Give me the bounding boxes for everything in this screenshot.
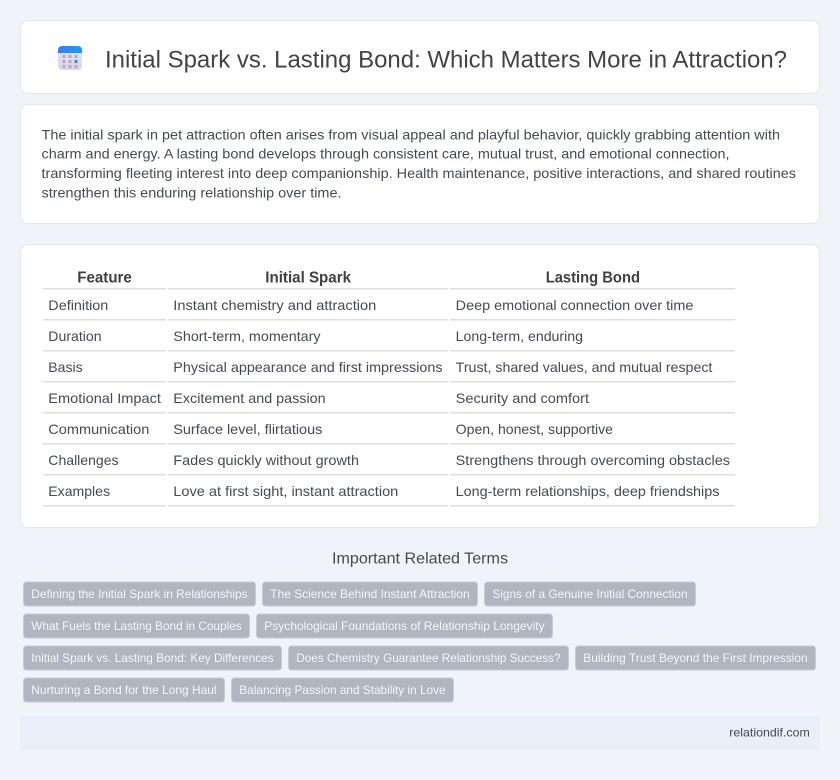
row: duration: Short-term, momentary <box>173 328 321 344</box>
row: duration: Long-term, enduring <box>456 328 583 344</box>
tag <box>24 614 250 638</box>
tag: Building Trust Beyond the First Impression <box>583 651 808 665</box>
paragraph text: strengthen this enduring relationship over time. <box>42 184 341 200</box>
panel: comparison table <box>20 244 820 528</box>
row: communication <box>48 421 613 437</box>
footer <box>20 716 820 750</box>
row: duration <box>48 328 583 344</box>
paragraph text: charm and energy. A lasting bond develops through consistent care, mutual trust, and emotional connection, <box>42 146 730 162</box>
tag: Balancing Passion and Stability in Love <box>239 683 446 697</box>
row: challenges <box>48 452 730 468</box>
tag <box>484 582 696 606</box>
row: emotional impact: Excitement and passion <box>173 390 326 406</box>
panel: related term tags <box>24 582 816 702</box>
row: emotional impact: Emotional Impact <box>48 390 161 406</box>
title: Initial Spark vs. Lasting Bond: Which Matters More in Attraction? <box>105 46 787 74</box>
table header row: Lasting Bond <box>546 270 640 286</box>
row: communication: Open, honest, supportive <box>456 421 613 437</box>
row: emotional impact: Security and comfort <box>456 390 589 406</box>
tag <box>24 678 224 702</box>
row: basis <box>48 359 713 375</box>
row: emotional impact <box>48 390 589 406</box>
row: definition <box>48 297 694 313</box>
icon: calendar <box>58 46 82 70</box>
row: examples: Examples <box>48 483 110 499</box>
table header row: Initial Spark <box>265 270 351 286</box>
row: definition: Definition <box>48 297 108 313</box>
tag: Nurturing a Bond for the Long Haul <box>31 683 217 697</box>
table header row: Feature <box>77 270 132 286</box>
tag <box>576 646 816 670</box>
tag <box>24 582 256 606</box>
table header row <box>77 270 640 286</box>
row: examples: Long-term relationships, deep friendships <box>456 483 719 499</box>
tag <box>288 646 568 670</box>
tag <box>256 614 552 638</box>
paragraph text <box>42 126 796 200</box>
row: basis: Basis <box>48 359 83 375</box>
tag <box>24 646 282 670</box>
panel: introduction <box>20 104 820 224</box>
row: challenges: Challenges <box>48 452 119 468</box>
row: examples <box>48 483 719 499</box>
tag <box>232 678 454 702</box>
row: challenges: Strengthens through overcoming obstacles <box>456 452 730 468</box>
paragraph text: transforming fleeting interest into deep companionship. Health maintenance, positive interactions, and shared routines <box>42 165 796 181</box>
row: basis: Trust, shared values, and mutual respect <box>456 359 713 375</box>
tag <box>262 582 478 606</box>
panel: header <box>20 20 820 94</box>
tag: Does Chemistry Guarantee Relationship Success? <box>296 651 561 665</box>
tag: The Science Behind Instant Attraction <box>270 587 470 601</box>
row: communication: Surface level, flirtatious <box>173 421 322 437</box>
row: definition: Deep emotional connection over time <box>456 297 694 313</box>
row: communication: Communication <box>48 421 149 437</box>
heading: related terms: Important Related Terms <box>332 550 508 568</box>
tag: Signs of a Genuine Initial Connection <box>492 587 688 601</box>
paragraph text: The initial spark in pet attraction often arises from visual appeal and playful behavior, quickly grabbing attention with <box>42 126 780 142</box>
row: duration: Duration <box>48 328 102 344</box>
tag: Defining the Initial Spark in Relationships <box>31 587 248 601</box>
tag: What Fuels the Lasting Bond in Couples <box>31 619 242 633</box>
footer source text: relationdif.com <box>729 726 810 740</box>
row: definition: Instant chemistry and attraction <box>173 297 376 313</box>
row: examples: Love at first sight, instant attraction <box>173 483 398 499</box>
tag: Initial Spark vs. Lasting Bond: Key Differences <box>31 651 274 665</box>
row: basis: Physical appearance and first impressions <box>173 359 443 375</box>
row: challenges: Fades quickly without growth <box>173 452 359 468</box>
tag: Psychological Foundations of Relationship Longevity <box>264 619 545 633</box>
